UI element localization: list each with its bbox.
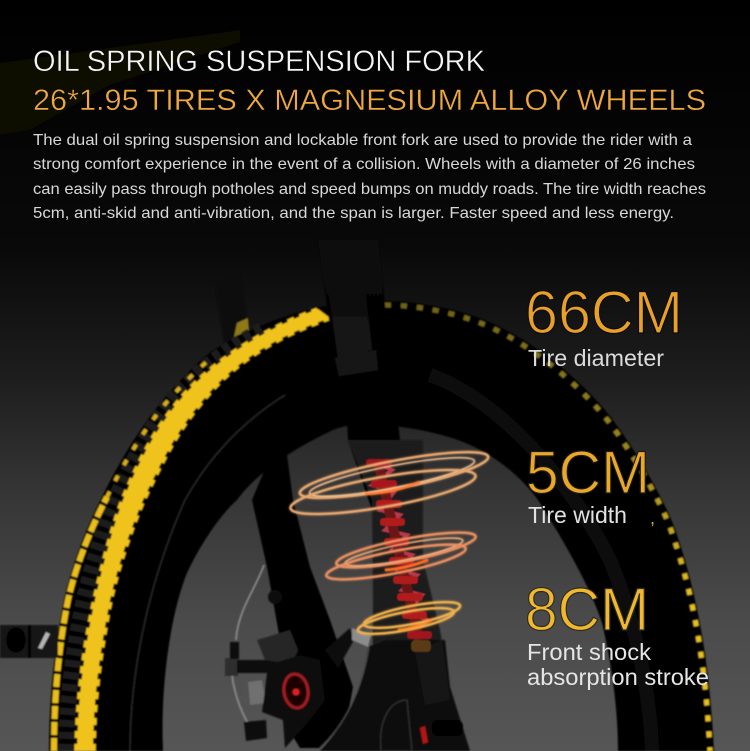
main fork upper leg (318, 240, 423, 510)
stat: 5CM tire width: 5CM (526, 439, 650, 506)
stat: 66CM tire diameter: 66CM (525, 279, 683, 346)
red coil spring (366, 459, 432, 652)
description paragraph (33, 132, 706, 222)
orange motion rings (288, 443, 491, 639)
left fork arm (252, 455, 353, 748)
stat: 8CM front shock absorption stroke (525, 576, 709, 690)
stat: 5CM tire width: , (650, 508, 655, 528)
spring base (411, 640, 431, 652)
hub arc highlight (320, 647, 369, 748)
stat: 8CM front shock absorption stroke: 8CM (525, 576, 649, 643)
lower ring (356, 597, 462, 639)
black caliper mass (262, 655, 325, 748)
lower outer yellow tread (54, 497, 107, 751)
fork label (234, 318, 249, 337)
upper ring (288, 443, 491, 523)
description paragraph: The dual oil spring suspension and lockable front fork are used to provide the rider with a (33, 132, 692, 149)
axle nut (381, 700, 412, 751)
lower leg shading (415, 640, 450, 705)
description paragraph: 5cm, anti-skid and anti-vibration, and the span is larger. Faster speed and less energy. (33, 205, 674, 222)
right translucent fork leg (348, 440, 470, 751)
lower fork leg black body (320, 640, 470, 751)
brake caliper assembly (225, 628, 371, 748)
stat: 66CM tire diameter: Tire diameter (528, 345, 664, 371)
description paragraph: can easily pass through potholes and speed bumps on muddy roads. The tire width reaches (33, 181, 706, 198)
fork crown ring (335, 350, 378, 376)
brake cable (232, 565, 264, 735)
cable clamp (268, 590, 282, 604)
pedal (0, 625, 58, 658)
upper outer yellow tread (107, 355, 215, 497)
wheel rim inner band (430, 375, 652, 751)
stat: 8CM front shock absorption stroke: absorption stroke (527, 664, 709, 690)
subheading: 26*1.95 TIRES X MAGNESIUM ALLOY WHEELS (33, 84, 706, 117)
tire tread (66, 330, 262, 751)
caliper cylinder (230, 642, 239, 659)
fork stanchion highlight (322, 245, 372, 358)
grey pad block (248, 680, 266, 705)
axle cylinder (432, 720, 463, 736)
description paragraph: strong comfort experience in the event of a collision. Wheels with a diameter of 26 inches (33, 156, 695, 173)
heading: OIL SPRING SUSPENSION FORK (33, 45, 485, 78)
wheel rim highlight (130, 395, 285, 751)
rear fork stanchion (215, 275, 252, 350)
axle red accent (420, 726, 428, 744)
front wheel tire (49, 301, 714, 751)
yellow tire stripe (76, 309, 331, 751)
middle ring (324, 526, 478, 586)
stat: 5CM tire width: Tire width (528, 502, 627, 528)
caliper grey mount (225, 658, 238, 676)
caliper top block (257, 630, 298, 664)
stat: 8CM front shock absorption stroke: Front shock (527, 639, 652, 665)
caliper arm (237, 660, 279, 673)
brake rotor arm (325, 628, 354, 668)
faint frame behind heading (0, 30, 240, 135)
lower bolts (244, 720, 267, 741)
right side tire tread dots (385, 305, 710, 751)
red brake disc centre (282, 672, 310, 710)
grey bracket (352, 628, 371, 647)
